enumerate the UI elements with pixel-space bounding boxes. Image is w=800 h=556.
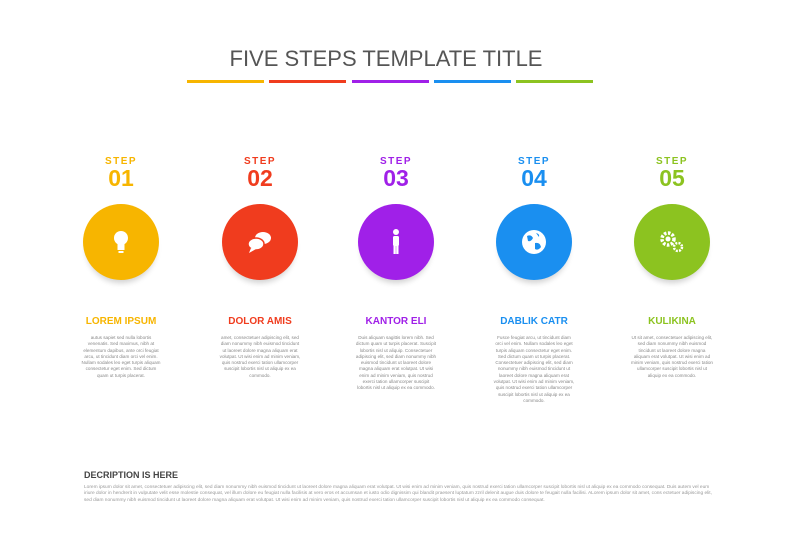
step 3: KANTOR ELI [366, 316, 426, 327]
step 1: LOREM IPSUM [86, 316, 156, 327]
step 2: 02 [247, 165, 273, 191]
description text: Lorem ipsum dolor sit amet, consectetuer adipiscing elit, sed diam nonummy nibh euismod tincidunt ut laoreet dolore magna aliquam erat volutpat. Ut wisi enim ad minim veniam, quis nostrud exerci tation ullamcorper suscipit lobortis nisl ut aliquip ex ea commodo consequat. Duis autem vel eum iriure dolor in hendrerit in vulputate velit esse molestie consequat, vel illum dolore eu feugiat nulla facilisis at vero eros et accumsan et iusto odio dignissim qui blandit praesent luptatum zzril delenit augue duis dolore te feugait nulla facilisi. ALorem ipsum dolor sit amet, cons ectetuer adipiscing elit, sed diam nonummy nibh euismod tincidunt ut laoreet dolore magna aliquam erat volutpat. Ut wisi enim ad minim veniam, quis nostrud exerci tation ullamcorper suscipit lobortis nisl ut aliquip ex ea commodo consequat. [84, 485, 712, 503]
step 5: KULIKINA [648, 316, 696, 327]
step 4 [494, 156, 574, 403]
icon: chat [222, 204, 298, 280]
step 4: STEP [518, 156, 550, 167]
step 1 [82, 156, 160, 378]
step 3: STEP [380, 156, 412, 167]
step 1: autus sapiet sed nulla lobortis venenatis. Sed maximus, nibh at elementum dapibus, ante orci feugiat arcu, ut tincidunt diam orci vel enim. Nullam sodales leo eget turpis aliquam consectetur eget enim. Sed dictum quam ut turpis placerat. [82, 335, 160, 378]
description heading: DECRIPTION IS HERE [84, 470, 178, 480]
step 5: 05 [659, 165, 685, 191]
step 2 [220, 156, 300, 378]
step 1: STEP [105, 156, 137, 167]
step 5: STEP [656, 156, 688, 167]
step 1: 01 [108, 165, 134, 191]
icon: bulb [83, 204, 159, 280]
step 4: 04 [521, 165, 547, 191]
step 2: STEP [244, 156, 276, 167]
icon: globe [496, 204, 572, 280]
step 4: DABLIK CATR [500, 316, 568, 327]
step 5 [631, 156, 713, 378]
step 4: Fusce feugiat arcu, ut tincidunt diam orci vel enim. Nullam sodales leo eget turpis aliquam consectetur eget enim. Sed dictum quam ut turpis placerat. Consectetuer adipiscing elit, sed diam nonummy nibh euismod tincidunt ut laoreet dolore magna aliquam erat volutpat. Ut wisi enim ad minim veniam, quis nostrud exerci tation ullamcorper suscipit lobortis nisl ut aliquip ex ea commodo. [494, 335, 574, 403]
step 3 [356, 156, 436, 390]
step 2: amet, consectetuer adipiscing elit, sed diam nonummy nibh euismod tincidunt ut laoreet dolore magna aliquam erat volutpat. Ut wisi enim ad minim veniam, quis nostrud exerci tation ullamcorper suscipit lobortis nisl ut aliquip ex ea commodo. [220, 335, 300, 378]
title underline bars [187, 80, 593, 83]
icon: gears [634, 204, 710, 280]
title: FIVE STEPS TEMPLATE TITLE [230, 46, 542, 71]
icon: person [358, 204, 434, 280]
step 3: Duis aliquam sagittis lorem nibh. Sed dictum quam ut turpis placerat. Suscipit lobortis nisl ut aliquip. Consectetuer adipiscing elit, sed diam nonummy nibh euismod tincidunt ut laoreet dolore magna aliquam erat volutpat. Ut wisi enim ad minim veniam, quis nostrud exerci tation ullamcorper suscipit lobortis nisl ut aliquip ex ea commodo. [356, 335, 436, 390]
step 2: DOLOR AMIS [228, 316, 292, 327]
step 3: 03 [383, 165, 409, 191]
step 5: Ut sit amet, consectetuer adipiscing elit, sed diam nonummy nibh euismod tincidunt ut laoreet dolore magna aliquam erat volutpat. Ut wisi enim ad minim veniam, quis nostrud exerci tation ullamcorper suscipit lobortis nisl ut aliquip ex ea commodo. [631, 335, 713, 378]
